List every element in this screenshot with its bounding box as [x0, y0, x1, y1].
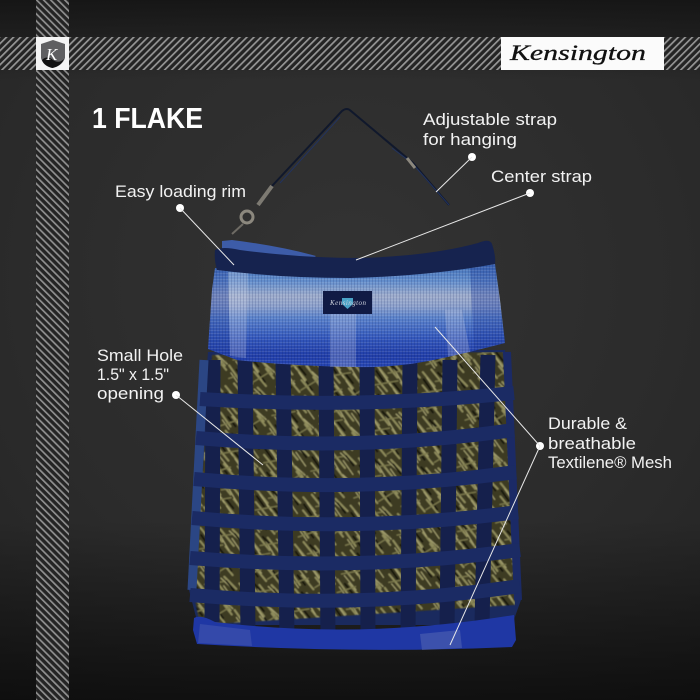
hay bag	[189, 240, 521, 650]
callout: Easy loading rim	[115, 182, 246, 265]
mesh weave texture	[208, 264, 505, 367]
callout: Small Hole: Small Hole	[97, 346, 183, 365]
decorative striped band vertical	[36, 0, 69, 700]
mesh side shading	[208, 264, 505, 356]
horizontal webbing straps	[190, 393, 520, 601]
hay openings	[193, 352, 515, 625]
callout: Durable mesh: Durable &	[548, 414, 628, 433]
vertical webbing straps	[192, 352, 518, 638]
icon: K shield logo	[36, 37, 69, 70]
bottom hem	[193, 615, 516, 650]
hanging strap and clip	[232, 109, 449, 234]
callout: Durable mesh: breathable	[548, 434, 636, 453]
callout: Center strap	[356, 167, 592, 260]
callout: Center strap: Center strap	[491, 167, 592, 186]
callout: Durable mesh	[435, 327, 672, 645]
callout: Small Hole: opening	[97, 384, 164, 403]
decorative striped band horizontal	[0, 37, 700, 70]
icon: K shield logo: K	[45, 45, 59, 64]
woven label: Kensington	[329, 299, 366, 307]
callout: Small Hole: 1.5" x 1.5"	[97, 365, 169, 384]
Kensington logo: Kensington	[509, 40, 646, 65]
Kensington logo	[501, 37, 664, 70]
dark rim binding	[215, 241, 495, 278]
rim inner fold	[222, 240, 316, 268]
woven label	[323, 291, 372, 314]
callout: Small Hole	[97, 346, 263, 465]
mesh plaid bands	[228, 272, 470, 367]
blue mesh panel	[208, 264, 505, 367]
callout: Durable mesh: Textilene® Mesh	[548, 453, 672, 472]
callout: Easy loading rim: Easy loading rim	[115, 182, 246, 201]
bag back and hay	[189, 350, 521, 625]
title: 1 FLAKE	[92, 103, 203, 135]
callout: Adjustable strap: Adjustable strap	[423, 110, 557, 129]
callout: Adjustable strap: for hanging	[423, 130, 517, 149]
callout: Adjustable strap	[423, 110, 557, 192]
